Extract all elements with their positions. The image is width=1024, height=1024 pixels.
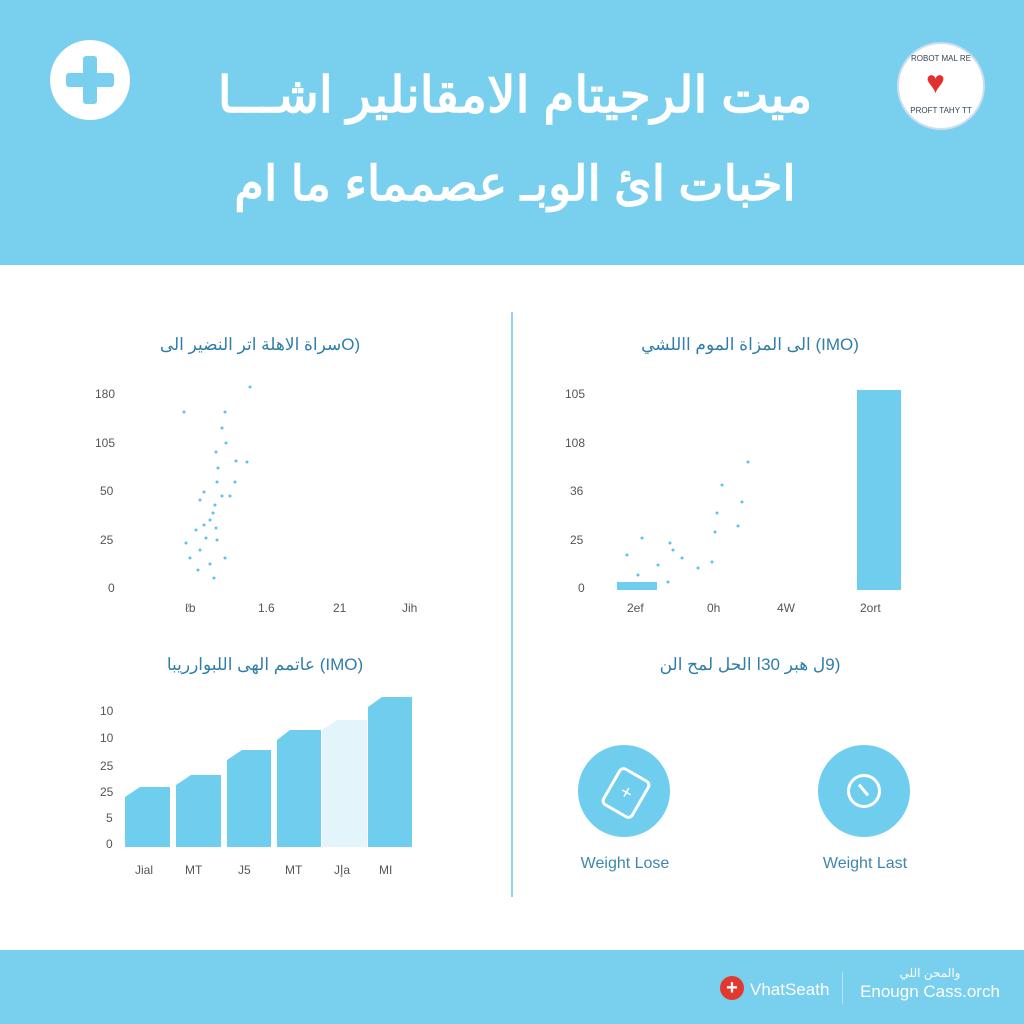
subtitle: اخبات ائ الوبـ عصمماء ما ام [234, 158, 796, 211]
chart: 105 [565, 387, 585, 401]
scatter chart [95, 386, 417, 615]
label: Weight Lose [581, 855, 669, 872]
scatter chart: 180 [95, 387, 115, 401]
scatter chart: 25 [100, 533, 114, 547]
bar chart [100, 697, 412, 878]
panel: bar chart bottom-left [100, 655, 412, 878]
scatter chart: 0 [108, 581, 115, 595]
bar chart: J5 [238, 863, 251, 877]
footer text [860, 966, 1000, 1001]
badge: heart [897, 42, 985, 130]
scatter chart: 21 [333, 601, 347, 615]
chart: 2ort [860, 601, 881, 615]
bar chart: 25 [100, 785, 114, 799]
footer brand: VhatSeath [750, 980, 829, 999]
footer text: والمحن اللي [900, 966, 960, 980]
bar chart: 10 [100, 731, 114, 745]
panel: weight icons bottom-right [578, 655, 910, 872]
heading: (9ل هبر 30ا الحل لمح الن [660, 655, 840, 674]
panel: mixed chart top-right [565, 335, 901, 615]
heading: (Oسراة الاهلة اتر النضير الى [160, 335, 360, 354]
scatter chart: 1.6 [258, 601, 275, 615]
title: ميت الرجيتام الامقانلير اشـــا [218, 67, 812, 123]
header band [0, 0, 1024, 265]
label: Weight Last [823, 855, 907, 872]
scatter chart: ℓb [185, 601, 196, 615]
bar chart: MI [379, 863, 392, 877]
icon: medical cross [50, 40, 130, 120]
bar chart: 0 [106, 837, 113, 851]
chart: 2ef [627, 601, 644, 615]
bar chart: 10 [100, 704, 114, 718]
chart: 4W [777, 601, 796, 615]
icon: scale: + [615, 781, 637, 805]
bar chart: Jial [135, 863, 153, 877]
footer logo: + [726, 977, 738, 999]
bar chart: 5 [106, 811, 113, 825]
bar chart: 25 [100, 759, 114, 773]
icon: scale [578, 745, 670, 837]
badge: heart: ROBOT MAL RE [911, 54, 971, 63]
chart: 36 [570, 484, 584, 498]
divider [511, 312, 513, 897]
scatter chart: Jih [402, 601, 417, 615]
bar chart: MT [285, 863, 303, 877]
heading: (IMO) الى المزاة الموم االلشي [641, 335, 859, 354]
badge: heart: ♥ [926, 64, 945, 100]
panel: scatter top-left [95, 335, 417, 615]
footer logo [720, 976, 744, 1000]
chart [565, 387, 901, 615]
footer text: Enougn Cass.orch [860, 982, 1000, 1001]
scatter chart: 105 [95, 436, 115, 450]
footer [0, 950, 1024, 1024]
bar chart: Jإa [334, 863, 350, 878]
icon: gauge [818, 745, 910, 837]
scatter chart: 50 [100, 484, 114, 498]
chart: 0 [578, 581, 585, 595]
chart: 108 [565, 436, 585, 450]
badge: heart: PROFT TAHY TT [910, 106, 972, 115]
heading: (IMO) عاتمم الهى اللبوارريبا [167, 655, 363, 674]
chart: 25 [570, 533, 584, 547]
bar chart: MT [185, 863, 203, 877]
chart: 0h [707, 601, 720, 615]
